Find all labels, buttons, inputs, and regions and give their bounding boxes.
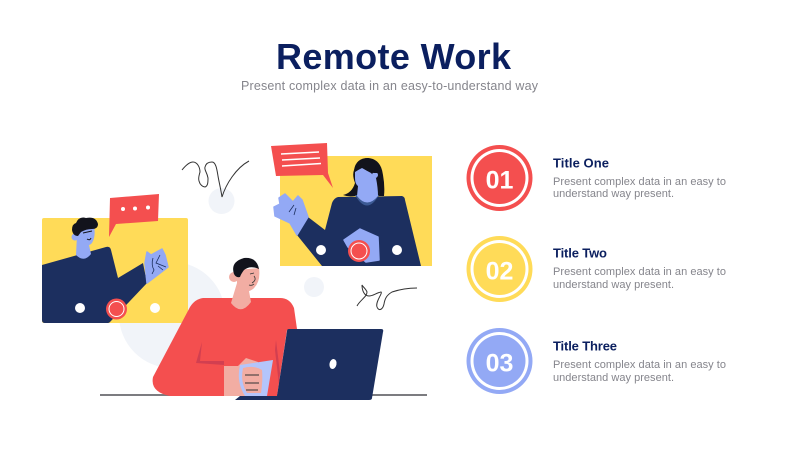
woman fringe — [354, 158, 380, 173]
woman raised hand — [274, 194, 308, 235]
item 03 — [466, 328, 726, 394]
forearm and hand — [224, 358, 266, 396]
neck and face — [231, 268, 259, 309]
description: Present complex data in an easy to — [553, 359, 726, 371]
man body — [42, 247, 147, 323]
squiggle: bottom right — [357, 285, 417, 310]
subtitle: Present complex data in an easy-to-understand way — [241, 79, 539, 93]
background blobs — [119, 188, 324, 368]
speech bubble: dots — [109, 194, 159, 237]
desk line — [100, 394, 427, 396]
person at laptop — [153, 258, 383, 400]
woman hair back — [343, 158, 384, 196]
heading: Title One — [553, 156, 609, 170]
item 02 — [466, 236, 726, 302]
heading: Title Two — [553, 246, 607, 260]
sweater — [153, 298, 297, 396]
mug — [239, 360, 273, 396]
description: Present complex data in an easy to — [553, 266, 726, 278]
hair — [233, 258, 259, 277]
badge 03 — [466, 328, 532, 394]
sweater folds — [196, 342, 224, 365]
heading: Title Three — [553, 338, 617, 354]
call buttons — [75, 303, 85, 313]
woman collar — [355, 195, 379, 206]
woman neck and face — [355, 168, 378, 202]
squiggle: top — [182, 161, 249, 197]
man hand — [145, 249, 168, 283]
illustration: remote work scene — [42, 143, 432, 400]
woman lower hand — [344, 229, 379, 262]
description: understand way present. — [553, 279, 674, 291]
badge 02 — [466, 236, 532, 302]
badge 01 — [466, 145, 532, 211]
badge 03: 03 — [486, 350, 513, 378]
badge 02: 02 — [486, 258, 513, 286]
title: Remote Work — [276, 36, 512, 77]
man neck and face — [76, 226, 95, 259]
panel: right video call — [271, 143, 432, 266]
man glasses and mouth — [83, 231, 92, 240]
panel: left video call — [42, 194, 188, 323]
speech bubble: lines — [271, 143, 333, 188]
item 01 — [466, 145, 726, 211]
man hair — [72, 218, 98, 236]
laptop — [235, 329, 383, 400]
call buttons — [316, 245, 326, 255]
face details — [249, 273, 255, 285]
description: understand way present. — [553, 188, 674, 200]
description: Present complex data in an easy to — [553, 176, 726, 188]
woman body — [297, 196, 421, 266]
badge 01: 01 — [486, 166, 513, 194]
description: understand way present. — [553, 372, 674, 384]
